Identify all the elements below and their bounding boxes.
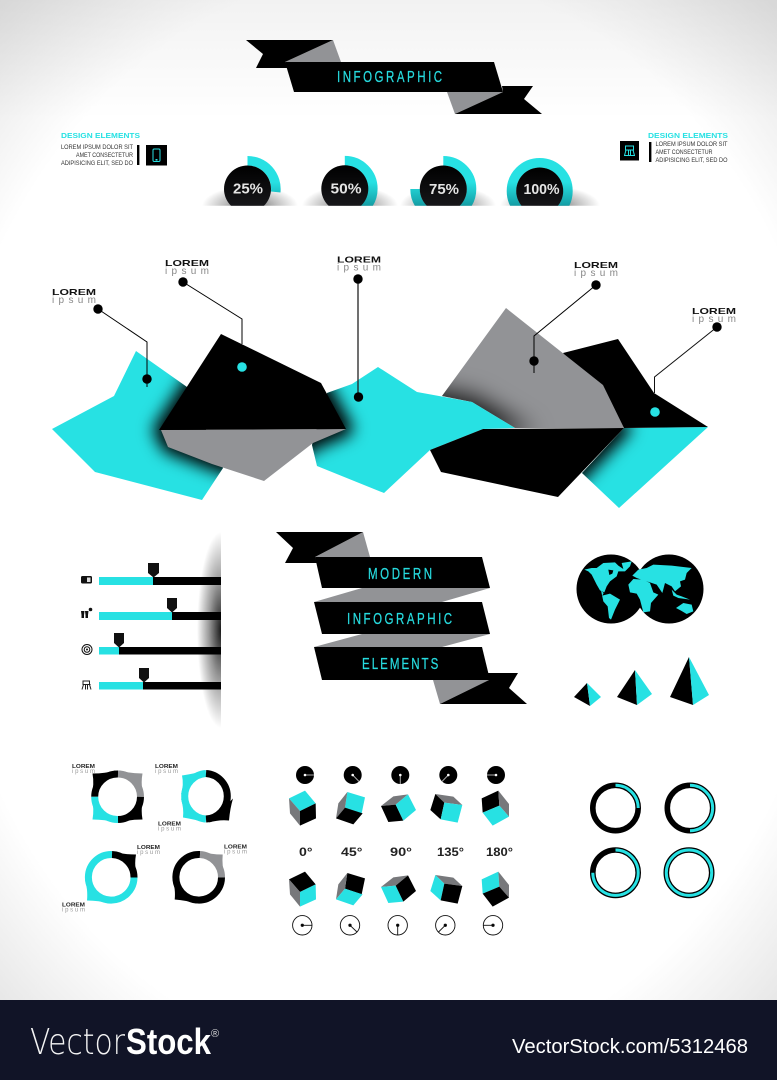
callout 4 bbox=[529, 260, 618, 373]
top ribbon banner bbox=[246, 40, 542, 114]
ring labels: LOREM bbox=[137, 845, 160, 851]
angle labels: 0° bbox=[299, 845, 313, 859]
pyramid set bbox=[574, 657, 709, 706]
gauge 100% bbox=[512, 163, 568, 219]
shape: right cyan bbox=[582, 427, 708, 508]
bottom cube row bbox=[289, 872, 509, 907]
ribbon title: INFOGRAPHIC bbox=[337, 67, 442, 85]
right note: design elements: ADIPISICING ELIT, SED DO bbox=[656, 157, 728, 164]
rotation cubes matrix bbox=[289, 766, 513, 935]
callout 1: ipsum bbox=[52, 295, 96, 306]
angle labels: 45° bbox=[341, 845, 363, 859]
shape: center cyan bbox=[312, 367, 515, 493]
segmented ring C bbox=[62, 845, 160, 914]
callout 4: LOREM bbox=[574, 260, 618, 270]
callout 2 bbox=[165, 258, 247, 372]
pyramid large bbox=[670, 657, 709, 705]
gauge 50% bbox=[321, 161, 373, 217]
slider 2 bbox=[81, 598, 221, 620]
callout 2: LOREM bbox=[165, 258, 209, 268]
pyramid medium bbox=[617, 670, 652, 705]
icon: battery bbox=[81, 576, 92, 584]
ribbon band: elements: ELEMENTS bbox=[362, 654, 438, 672]
slider bars panel bbox=[81, 536, 221, 724]
callout 1: LOREM bbox=[52, 287, 96, 297]
callout 3: LOREM bbox=[337, 254, 381, 264]
icon: target bbox=[82, 644, 92, 654]
slider 4 bbox=[82, 668, 221, 690]
slider 3 bbox=[82, 633, 221, 654]
ring label bbox=[72, 764, 95, 775]
ring labels bbox=[62, 845, 160, 914]
left note: design elements bbox=[61, 131, 167, 167]
pyramid small bbox=[574, 683, 601, 706]
ring label: ipsum bbox=[72, 769, 95, 775]
progress rings grid bbox=[593, 785, 713, 895]
ring 25 percent bbox=[593, 785, 638, 831]
callout 2: ipsum bbox=[165, 266, 209, 277]
right note: design elements bbox=[620, 131, 728, 164]
ring labels: ipsum bbox=[155, 769, 178, 775]
gauge 100%: 100% bbox=[524, 181, 560, 198]
ring labels: ipsum bbox=[158, 826, 181, 832]
segmented ring A bbox=[72, 764, 144, 822]
icon: people bbox=[81, 608, 92, 618]
shape: black peak bbox=[159, 334, 346, 430]
shape: left cyan bbox=[52, 351, 223, 500]
ring label: LOREM bbox=[72, 764, 95, 770]
footer logo: ® bbox=[211, 1028, 219, 1040]
center ribbon banner bbox=[276, 532, 527, 704]
gauge 50%: 50% bbox=[330, 180, 362, 198]
ring labels bbox=[224, 844, 247, 856]
angle labels bbox=[299, 845, 513, 859]
ring labels: LOREM bbox=[158, 822, 181, 828]
icon: kiosk bbox=[82, 681, 91, 690]
ring labels: ipsum bbox=[62, 908, 85, 914]
left note: design elements: AMET CONSECTETUR bbox=[76, 152, 133, 159]
gauge 75%: 75% bbox=[429, 181, 459, 198]
left note: design elements: ADIPISICING ELIT, SED DO bbox=[61, 160, 133, 167]
left note: design elements: LOREM IPSUM DOLOR SIT bbox=[61, 144, 133, 151]
right note: design elements: LOREM IPSUM DOLOR SIT bbox=[656, 141, 728, 148]
segmented ring B bbox=[155, 764, 233, 832]
callout 5: LOREM bbox=[692, 306, 736, 316]
footer bar bbox=[0, 1000, 777, 1080]
footer logo: Vector bbox=[30, 1022, 125, 1063]
callout 1 bbox=[52, 287, 152, 387]
ribbon band: infographic bbox=[314, 602, 490, 634]
icon: kiosk bbox=[620, 141, 639, 160]
shape: grey lower bbox=[161, 429, 346, 481]
ribbon band: modern: MODERN bbox=[368, 564, 432, 582]
footer logo bbox=[30, 1021, 219, 1063]
callout 3: ipsum bbox=[337, 262, 381, 274]
ring labels bbox=[155, 764, 181, 832]
ring 50 percent bbox=[667, 785, 713, 831]
shape: grey peak bbox=[442, 308, 708, 428]
top dial row bbox=[296, 766, 505, 784]
shape: black lower bbox=[430, 428, 624, 497]
callout 3 bbox=[337, 254, 381, 402]
mountain chart bbox=[52, 254, 736, 508]
ribbon band: infographic: INFOGRAPHIC bbox=[347, 609, 452, 627]
ribbon band: elements bbox=[314, 647, 490, 680]
ring 100 percent bbox=[666, 850, 712, 895]
top cube row bbox=[289, 791, 509, 826]
gauge 75% bbox=[415, 161, 472, 217]
slider 1 bbox=[81, 563, 221, 585]
angle labels: 135° bbox=[437, 845, 464, 859]
ring labels: LOREM bbox=[224, 844, 247, 850]
ring labels: ipsum bbox=[224, 850, 247, 856]
angle labels: 180° bbox=[486, 845, 513, 859]
segmented ring D bbox=[173, 844, 247, 904]
ribbon band: modern bbox=[315, 557, 490, 588]
world map globes bbox=[576, 554, 704, 624]
gauge 25% bbox=[224, 161, 276, 212]
ring labels: ipsum bbox=[137, 850, 160, 856]
right note: design elements: AMET CONSECTETUR bbox=[656, 149, 713, 156]
progress gauges row bbox=[205, 156, 597, 206]
gauge 25%: 25% bbox=[233, 180, 263, 198]
callout 5 bbox=[650, 306, 736, 417]
angle labels: 90° bbox=[390, 845, 412, 859]
footer url: VectorStock.com/5312468 bbox=[512, 1036, 748, 1058]
ring labels: LOREM bbox=[62, 902, 85, 908]
callout 5: ipsum bbox=[692, 314, 736, 325]
left note: design elements: DESIGN ELEMENTS bbox=[61, 131, 140, 140]
right note: design elements: DESIGN ELEMENTS bbox=[648, 131, 728, 140]
footer logo: Stock bbox=[126, 1021, 212, 1062]
callout 4: ipsum bbox=[574, 268, 618, 279]
ring 75 percent bbox=[593, 850, 638, 895]
bottom dial row bbox=[293, 916, 503, 935]
icon: phone bbox=[146, 145, 167, 166]
ring labels: LOREM bbox=[155, 764, 178, 770]
